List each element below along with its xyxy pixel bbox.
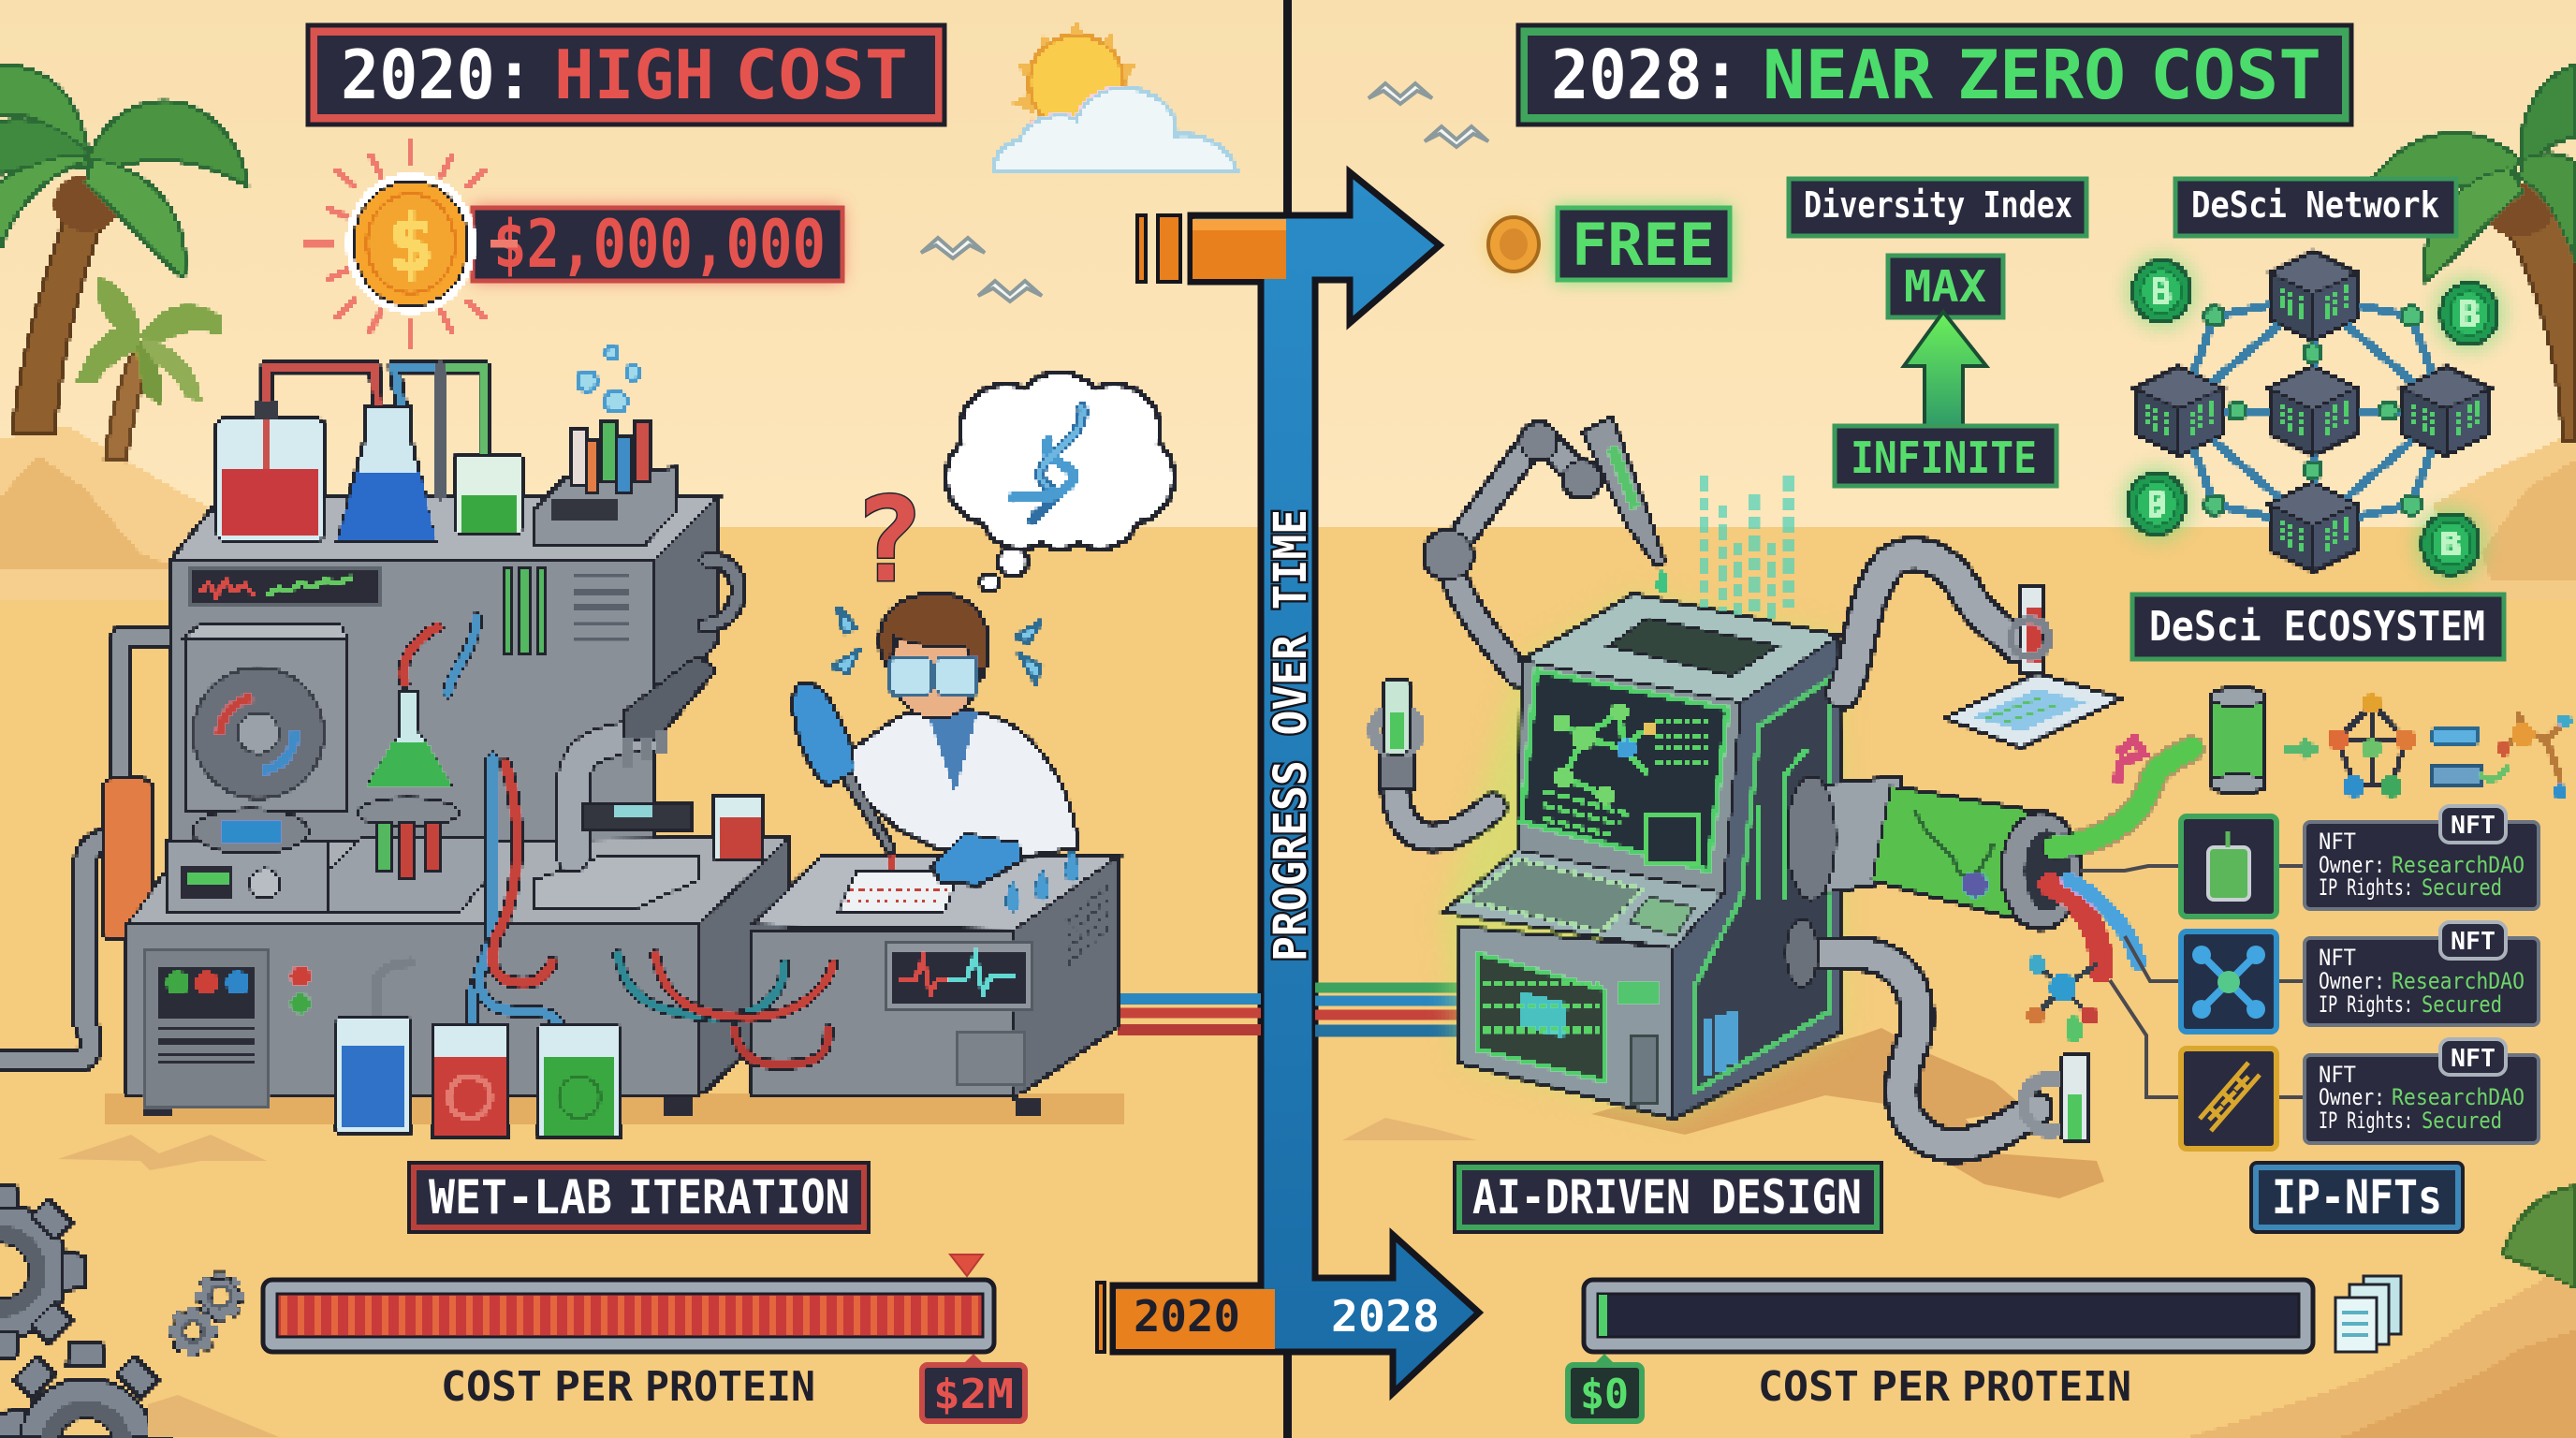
test tube rack <box>534 423 678 544</box>
caption: cost per protein, 2020: PER <box>554 1363 634 1411</box>
sand marks <box>58 1118 1477 1170</box>
label: AI-driven design: AI-DRIVEN <box>1472 1170 1690 1225</box>
caption: cost per protein, 2020: COST <box>441 1363 542 1411</box>
cost callout: $2,000,000 <box>304 140 842 348</box>
water drops <box>1005 850 1078 912</box>
title: 2020 high cost: 2020: <box>341 36 534 114</box>
title: 2028 near zero cost: 2028: <box>1551 36 1740 114</box>
NFT card: ResearchDAO <box>2392 968 2525 994</box>
left pipe and capsule <box>0 637 164 1061</box>
NFT badge <box>2440 1039 2506 1075</box>
robot arm <box>1424 418 1668 674</box>
label: wet-lab iteration: ITERATION <box>628 1170 850 1225</box>
well plate <box>838 871 961 912</box>
cables crossing the centre <box>1118 988 1456 1031</box>
icon: molecule <box>2027 956 2098 1043</box>
red tube <box>267 367 378 412</box>
main screen with molecule <box>1521 670 1728 871</box>
birds <box>921 83 1488 301</box>
icon: dollar coin <box>304 140 518 348</box>
title: 2028 near zero cost: NEAR <box>1763 36 1934 114</box>
lab coat <box>847 709 1076 857</box>
icon: canister token <box>2181 816 2276 917</box>
NFT card: Secured <box>2422 991 2502 1018</box>
label: diversity index <box>1789 179 2086 236</box>
right unit <box>752 848 1118 1118</box>
cost callout: $2,000,000: $2,000,000 <box>493 206 826 283</box>
scientist <box>794 594 1076 885</box>
caption: cost per protein, 2028: COST <box>1758 1363 1859 1411</box>
NFT card: Secured <box>2422 874 2502 901</box>
trailing bubbles <box>999 548 1027 576</box>
bubble fill <box>949 375 1171 546</box>
AI machine <box>1374 418 2191 1146</box>
lower screen <box>1477 953 1604 1081</box>
small chips <box>2434 728 2509 785</box>
NFT badge: NFT <box>2451 928 2496 956</box>
IP-NFT row 1 <box>2181 806 2539 917</box>
top-mounted glassware <box>217 347 678 544</box>
right sand dune <box>2434 433 2576 599</box>
glow <box>1444 594 1842 1118</box>
blue and green tubes <box>394 367 485 459</box>
loop pipe <box>704 560 738 625</box>
large palm tree, left <box>0 66 247 433</box>
arrow <box>2284 741 2315 756</box>
timeline title: PROGRESS OVER TIME <box>1265 509 1317 961</box>
thought bubble <box>947 374 1173 591</box>
diversity arrow <box>1835 256 2056 486</box>
blue flask <box>337 408 435 541</box>
label: IP-NFTs <box>2251 1163 2463 1232</box>
cube nodes <box>2136 252 2489 571</box>
label: wet-lab iteration: WET-LAB <box>429 1170 612 1225</box>
caption: cost per protein, 2028 <box>1758 1363 2131 1411</box>
NFT card: NFT <box>2319 829 2356 855</box>
side panel circuits <box>1696 679 1830 1091</box>
NFT badge: NFT <box>2451 1045 2496 1073</box>
title: 2020 high cost: COST <box>735 36 908 114</box>
title: 2028 near zero cost: ZERO <box>1957 36 2126 114</box>
year 2028: 2028 <box>1331 1291 1440 1342</box>
right glove <box>932 833 1022 885</box>
cost bar: 2020 <box>263 1255 994 1352</box>
year 2020: 2020 <box>1134 1291 1240 1342</box>
small nodes <box>2205 307 2421 514</box>
head <box>880 594 988 719</box>
title: 2028 near zero cost <box>1518 25 2351 125</box>
NFT badge <box>2440 806 2506 843</box>
NFT card: Owner: <box>2319 852 2385 878</box>
output streams <box>2050 749 2191 971</box>
icon: molecule token <box>2181 932 2276 1032</box>
badge: $0 <box>1568 1354 1642 1421</box>
NFT card: IP Rights: <box>2319 991 2413 1018</box>
small gears <box>196 1272 244 1321</box>
left sand dune <box>0 426 217 599</box>
title: 2028 near zero cost: COST <box>2150 36 2321 114</box>
data rain <box>1704 477 1789 646</box>
panel glow <box>473 206 842 281</box>
sun and cloud <box>995 22 1236 170</box>
lower bench <box>127 838 788 925</box>
NFT badge <box>2440 922 2506 959</box>
gears <box>0 1185 244 1437</box>
caption: cost per protein, 2028: PER <box>1871 1363 1951 1411</box>
control panel <box>144 951 311 1108</box>
desci network diagram <box>2121 252 2505 581</box>
icon: lattice token <box>2181 1049 2276 1149</box>
readout display <box>189 569 382 607</box>
palm tree, right <box>2364 66 2576 440</box>
right side face <box>1674 636 1842 1118</box>
green beaker <box>456 454 521 535</box>
lower front face <box>1460 927 1674 1118</box>
blue and red tubes <box>403 618 565 1049</box>
badge: $2M <box>922 1354 1025 1421</box>
infinite label: INFINITE <box>1851 433 2037 483</box>
upper unit top face <box>172 496 719 559</box>
NFT card: NFT <box>2319 1062 2356 1088</box>
shirt <box>927 713 978 796</box>
max label <box>1888 256 2003 317</box>
pink molecule <box>2117 740 2144 782</box>
upper unit side face <box>655 496 719 721</box>
keyboard shelf <box>1444 850 1723 948</box>
max label: MAX <box>1904 261 1986 312</box>
connector lines: tube to NFT icons <box>2080 866 2305 1097</box>
NFT card <box>2305 822 2539 909</box>
left hose with vial <box>1374 681 1493 838</box>
heart monitor <box>886 944 1032 1011</box>
label: desci ecosystem: DeSci ECOSYSTEM <box>2149 603 2485 651</box>
title: 2020 high cost: HIGH <box>554 36 714 114</box>
links <box>2179 296 2446 527</box>
NFT badge: NFT <box>2451 812 2496 840</box>
bitcoin coins <box>2121 254 2505 581</box>
shadow <box>107 1093 1125 1125</box>
lower beakers <box>337 962 621 1138</box>
free label: FREE <box>1572 211 1715 279</box>
label: diversity index: Diversity Index <box>1804 184 2072 226</box>
centrifuge box <box>184 623 347 811</box>
NFT card: Secured <box>2422 1108 2502 1134</box>
cost bar: 2028 <box>1584 1280 2313 1352</box>
bar fill <box>277 1294 983 1337</box>
NFT card: ResearchDAO <box>2392 1084 2525 1110</box>
badge: $2M: $2M <box>933 1371 1014 1418</box>
ground shadow of AI machine <box>1591 1028 2104 1198</box>
upper hose with test tube <box>1842 554 2119 747</box>
NFT card <box>2305 1055 2539 1143</box>
badge: $0: $0 <box>1580 1371 1629 1418</box>
bar fill sliver <box>1599 1295 1607 1336</box>
bubble outline <box>947 374 1173 548</box>
upper unit front face <box>172 559 655 858</box>
glove holding pipette <box>794 683 895 854</box>
caption: cost per protein, 2020: PROTEIN <box>645 1363 815 1411</box>
microscope <box>534 655 715 908</box>
wet-lab machine <box>0 347 1125 1138</box>
small device <box>168 809 328 912</box>
central timeline arrow <box>1097 172 1479 1393</box>
icon: question mark: ? <box>853 473 924 609</box>
icon: dollar coin: $ <box>388 198 434 289</box>
top face <box>1522 594 1838 702</box>
cloud <box>995 88 1236 170</box>
level bars and vents <box>503 569 628 653</box>
small palm tree, left <box>77 278 223 461</box>
label: IP-NFTs: IP-NFTs <box>2272 1170 2442 1225</box>
NFT card: Owner: <box>2319 968 2385 994</box>
label: AI-driven design <box>1455 1163 1881 1232</box>
green flask <box>367 693 451 786</box>
canister <box>2211 688 2265 793</box>
IP-NFT row 3 <box>2181 1039 2539 1149</box>
bubbles <box>578 347 639 412</box>
centre divider line <box>1283 0 1292 1438</box>
icon: DNA helix <box>1013 406 1083 521</box>
bottom gear, cropped by the page edge <box>0 1343 172 1437</box>
green beaker <box>538 1024 621 1138</box>
NFT card: IP Rights: <box>2319 1108 2413 1134</box>
network sphere <box>2328 695 2416 797</box>
bioreactor tube <box>1787 776 2080 929</box>
red beaker <box>432 1024 509 1138</box>
IP-NFT row 2 <box>2181 922 2539 1032</box>
chain molecule <box>2497 712 2571 798</box>
sun <box>1013 22 1134 136</box>
NFT card: IP Rights: <box>2319 874 2413 901</box>
marker <box>950 1255 983 1276</box>
title: 2020 high cost <box>308 25 944 125</box>
bottom-right dune and shrub <box>2191 1187 2576 1437</box>
NFT card: Owner: <box>2319 1084 2385 1110</box>
label: wet-lab iteration <box>409 1163 869 1232</box>
caption: cost per protein, 2028: PROTEIN <box>1962 1363 2131 1411</box>
red beaker <box>217 401 324 541</box>
label: desci ecosystem <box>2132 594 2504 659</box>
label: desci network <box>2175 179 2456 236</box>
sweat drops <box>833 607 1041 682</box>
orange start, top <box>1137 215 1286 282</box>
upper front face <box>1518 661 1741 893</box>
label: AI-driven design: DESIGN <box>1711 1170 1862 1225</box>
bottom-left dune <box>148 1395 279 1437</box>
caption: cost per protein, 2020 <box>441 1363 815 1411</box>
NFT card <box>2305 938 2539 1025</box>
icon: small coin <box>1483 213 1544 275</box>
orange start, bottom <box>1097 1283 1275 1352</box>
ecosystem icons row <box>2117 688 2571 798</box>
arrow <box>1904 312 1986 429</box>
label: desci network: DeSci Network <box>2191 184 2439 226</box>
NFT card: NFT <box>2319 945 2356 971</box>
NFT card: ResearchDAO <box>2392 852 2525 878</box>
blue beaker <box>337 962 412 1134</box>
lower hose with vial <box>1786 919 2088 1146</box>
interconnect cables <box>618 955 833 1064</box>
icon: documents <box>2335 1276 2401 1352</box>
small red beaker <box>714 795 764 861</box>
test tube carousel <box>329 798 493 914</box>
